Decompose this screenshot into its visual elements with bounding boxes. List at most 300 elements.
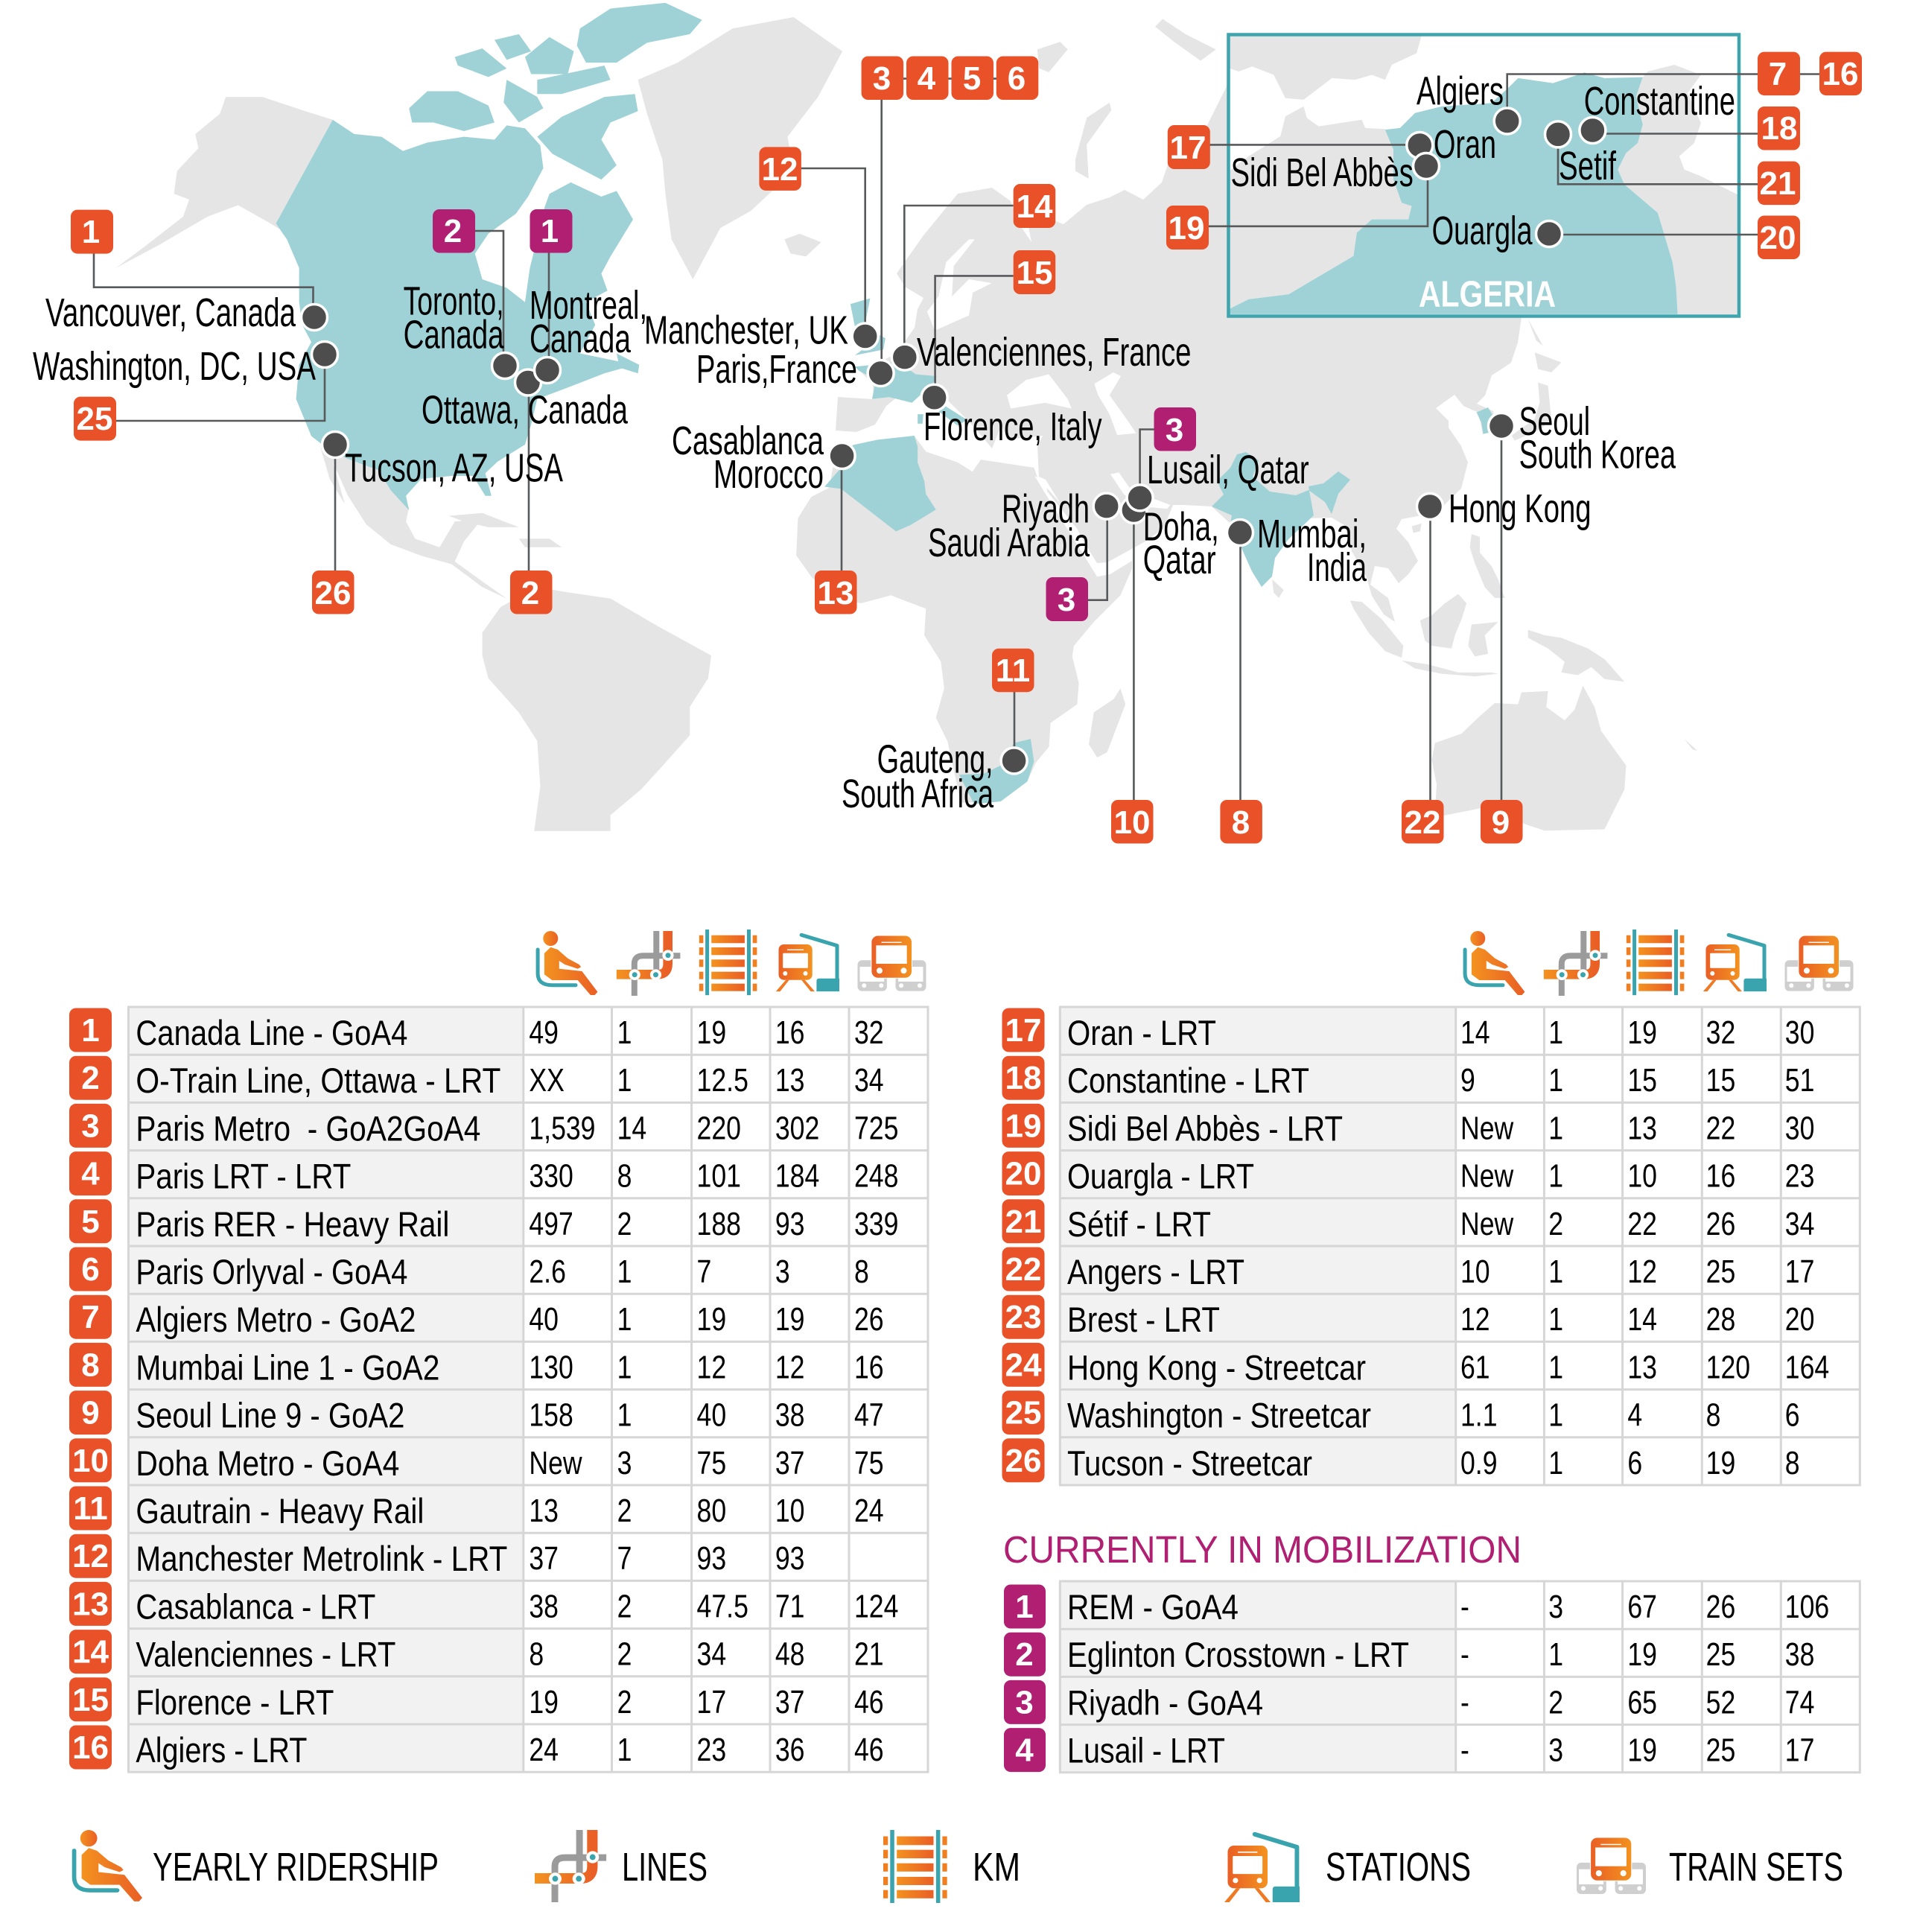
row 26 [1002, 1438, 1800, 1484]
row 8: 130 [529, 1350, 573, 1385]
map number badges: 2 [521, 575, 539, 611]
row 22: 25 [1706, 1254, 1735, 1290]
row 24 [1002, 1343, 1829, 1388]
row 1: 32 [854, 1015, 884, 1051]
mobilization row 4: 4 [1015, 1732, 1034, 1769]
legend: train sets: TRAIN SETS [1669, 1845, 1843, 1890]
row 20: New [1460, 1158, 1513, 1194]
row 24: 1 [1548, 1350, 1563, 1385]
row 21: 21 [1005, 1204, 1041, 1240]
row 3: 1,539 [529, 1110, 596, 1146]
row 22 [1002, 1247, 1814, 1292]
row 21: Sétif - LRT [1067, 1205, 1211, 1245]
row 7: 19 [775, 1302, 804, 1338]
row 25: 1 [1548, 1397, 1563, 1433]
row 19: 1 [1548, 1110, 1563, 1146]
row 19: 30 [1785, 1110, 1814, 1146]
row 24: 120 [1706, 1350, 1750, 1385]
row 26: Tucson - Streetcar [1067, 1444, 1312, 1484]
inset title: ALGERIA: ALGERIA [1419, 274, 1556, 315]
row 8: 12 [697, 1350, 726, 1385]
legend: stations: STATIONS [1326, 1845, 1471, 1890]
row 4: 101 [697, 1158, 741, 1194]
row 20: 16 [1706, 1158, 1735, 1194]
row 14: 48 [775, 1636, 804, 1672]
row 15: 2 [617, 1684, 632, 1720]
map number badges: 1 [82, 214, 100, 250]
row 16: 23 [697, 1732, 726, 1768]
city labels: South Africa [842, 772, 994, 816]
map number badges: 4 [918, 60, 936, 97]
row 12: 12 [72, 1538, 109, 1574]
row 23: 20 [1785, 1302, 1814, 1338]
legend: lines: LINES [622, 1845, 708, 1890]
row 26: 1 [1548, 1445, 1563, 1481]
row 10 [69, 1438, 884, 1484]
map number badges: 8 [1232, 804, 1250, 841]
row 8: 16 [854, 1350, 884, 1385]
mobilization row 4: 19 [1627, 1732, 1657, 1768]
map number badges: 9 [1492, 804, 1510, 841]
map number badges: 15 [1017, 255, 1052, 291]
mobilization row 2 [1004, 1633, 1814, 1677]
row 2: 1 [617, 1063, 632, 1099]
row 21 [1002, 1199, 1814, 1245]
row 14 [69, 1630, 884, 1675]
row 23: 1 [1548, 1302, 1563, 1338]
mobilization row 2: 2 [1015, 1636, 1034, 1673]
location dots [301, 108, 1606, 774]
row 5: 339 [854, 1206, 898, 1242]
row 23: Brest - LRT [1067, 1300, 1220, 1340]
city labels: Gauteng, [877, 737, 993, 782]
row 3: 725 [854, 1110, 898, 1146]
mobilization row 4: 25 [1706, 1732, 1735, 1768]
row 10: 37 [775, 1445, 804, 1481]
row 18: Constantine - LRT [1067, 1061, 1309, 1101]
row 10: Doha Metro - GoA4 [136, 1444, 399, 1484]
row 16: 24 [529, 1732, 559, 1768]
row 6: 2.6 [529, 1254, 566, 1290]
mobilization row 3 [1004, 1680, 1814, 1724]
mobilization row 3: 52 [1706, 1685, 1735, 1720]
city labels: India [1307, 545, 1367, 590]
row 16: Algiers - LRT [136, 1731, 307, 1770]
row 9: 1 [617, 1397, 632, 1433]
row 4 [69, 1151, 898, 1197]
row 14: 34 [697, 1636, 726, 1672]
row 16: 36 [775, 1732, 804, 1768]
row 2: 12.5 [697, 1063, 748, 1099]
row 22: 22 [1005, 1251, 1041, 1288]
row 23: 23 [1005, 1299, 1041, 1335]
mobilization row 2: Eglinton Crosstown - LRT [1067, 1636, 1409, 1675]
row 8: 1 [617, 1350, 632, 1385]
row 16: 1 [617, 1732, 632, 1768]
row 1: 16 [775, 1015, 804, 1051]
map number badges: 3 [873, 60, 891, 97]
row 23 [1002, 1295, 1814, 1340]
mobilization row 3: 2 [1548, 1685, 1563, 1720]
row 25 [1002, 1391, 1800, 1436]
row 9: Seoul Line 9 - GoA2 [136, 1396, 404, 1436]
row 1: 1 [617, 1015, 632, 1051]
row 4: 248 [854, 1158, 898, 1194]
row 26: 19 [1706, 1445, 1735, 1481]
mobilization row 1 [1004, 1585, 1829, 1628]
row 22: 12 [1627, 1254, 1657, 1290]
city labels: Toronto, [404, 279, 504, 323]
row 4: 4 [81, 1156, 100, 1192]
row 11: 24 [854, 1493, 884, 1529]
map number badges: 26 [315, 575, 351, 611]
row 6: 3 [775, 1254, 790, 1290]
row 2: 34 [854, 1063, 884, 1099]
leader lines [94, 74, 1819, 800]
row 26: 0.9 [1460, 1445, 1498, 1481]
row 13: 38 [529, 1589, 559, 1624]
row 14: 14 [72, 1634, 109, 1671]
row 9 [69, 1391, 884, 1436]
city labels: Algiers [1417, 69, 1504, 114]
mobilization row 4: Lusail - LRT [1067, 1732, 1225, 1771]
row 21: 22 [1627, 1206, 1657, 1242]
map number badges: 3 [1166, 412, 1183, 448]
map number badges: 16 [1822, 56, 1858, 92]
row 13: 71 [775, 1589, 804, 1624]
city labels: Sidi Bel Abbès [1231, 150, 1414, 195]
row 12: Manchester Metrolink - LRT [136, 1539, 507, 1579]
row 18: 15 [1627, 1063, 1657, 1099]
row 26: 8 [1785, 1445, 1800, 1481]
row 5: 2 [617, 1206, 632, 1242]
row 12: 93 [697, 1541, 726, 1577]
map number badges: 14 [1017, 188, 1053, 225]
row 6: Paris Orlyval - GoA4 [136, 1253, 407, 1292]
row 6: 6 [81, 1251, 100, 1288]
row 15 [69, 1677, 884, 1723]
row 16: 16 [72, 1729, 109, 1766]
mobilization row 3: Riyadh - GoA4 [1067, 1683, 1263, 1723]
map number badges: 22 [1405, 804, 1440, 841]
row 20: Ouargla - LRT [1067, 1157, 1254, 1197]
land: Southeast Asia and Australia [1272, 524, 1697, 830]
row 18: 18 [1005, 1060, 1041, 1096]
row 3: 302 [775, 1110, 819, 1146]
row 16 [69, 1725, 884, 1770]
row 19: 22 [1706, 1110, 1735, 1146]
teal: Canada and USA [276, 3, 702, 510]
map number badges: 21 [1760, 165, 1796, 202]
teal: India [1212, 452, 1350, 587]
row 7 [69, 1295, 884, 1340]
row 8 [69, 1343, 884, 1388]
row 20: 20 [1005, 1156, 1041, 1192]
map number badges: 25 [77, 401, 112, 437]
mobilization row 1: - [1460, 1589, 1469, 1625]
row 7: 19 [697, 1302, 726, 1338]
teal: UK, France, Italy [851, 299, 967, 425]
map number badges: 2 [444, 213, 462, 250]
row 12: 93 [775, 1541, 804, 1577]
map number badges: 11 [996, 652, 1030, 689]
land: Eurasia [836, 45, 1713, 622]
row 25: 8 [1706, 1397, 1720, 1433]
world map [33, 3, 1862, 843]
row 17: 30 [1785, 1015, 1814, 1051]
row 13 [69, 1582, 898, 1627]
row 11: 10 [775, 1493, 804, 1529]
legend: km [883, 1830, 1020, 1903]
row 6 [69, 1247, 869, 1292]
table: operating systems 1-16 [69, 1007, 929, 1772]
row 13: 13 [72, 1586, 109, 1622]
row 3: 220 [697, 1110, 741, 1146]
land: Japan [1511, 320, 1561, 440]
row 2: 13 [775, 1063, 804, 1099]
row 11: 2 [617, 1493, 632, 1529]
row 19 [1002, 1104, 1814, 1148]
legend: yearly ridership: YEARLY RIDERSHIP [153, 1845, 439, 1890]
row 7: 7 [81, 1299, 100, 1335]
row 5 [69, 1199, 898, 1245]
row 21: 34 [1785, 1206, 1814, 1242]
row 9: 9 [81, 1395, 100, 1431]
row 15: 15 [72, 1682, 109, 1718]
mobilization row 1: 26 [1706, 1589, 1735, 1625]
city labels: Riyadh [1002, 487, 1090, 532]
map number badges: 1 [541, 213, 559, 250]
row 12 [69, 1534, 804, 1579]
city labels: Florence, Italy [923, 404, 1102, 449]
row 12: 7 [617, 1541, 632, 1577]
row 23: 14 [1627, 1302, 1657, 1338]
row 22: Angers - LRT [1067, 1253, 1244, 1292]
row 10: New [529, 1445, 582, 1481]
row 8: 8 [81, 1347, 100, 1383]
row 9: 40 [697, 1397, 726, 1433]
legend [74, 1830, 1843, 1903]
row 6: 1 [617, 1254, 632, 1290]
row 18: 9 [1460, 1063, 1475, 1099]
city labels: Washington, DC, USA [33, 344, 316, 389]
mobilization row 4: 3 [1548, 1732, 1563, 1768]
row 24: 24 [1005, 1347, 1042, 1383]
city labels: South Korea [1519, 433, 1676, 477]
seas: Baltic, Black, Caspian [927, 239, 1136, 435]
teal: Algeria, South Africa [824, 436, 1034, 804]
row 22: 17 [1785, 1254, 1814, 1290]
legend: yearly ridership [74, 1830, 439, 1901]
row 25: 1.1 [1460, 1397, 1498, 1433]
column icons: left table [538, 930, 926, 996]
row 12: 37 [529, 1541, 559, 1577]
city labels: Casablanca [672, 419, 824, 463]
mobilization row 3: 3 [1015, 1684, 1034, 1720]
legend: train sets [1577, 1837, 1843, 1894]
row 6: 8 [854, 1254, 869, 1290]
mobilization row 1: REM - GoA4 [1067, 1588, 1239, 1627]
row 17: 14 [1460, 1015, 1490, 1051]
city labels: Saudi Arabia [928, 521, 1090, 565]
row 17: Oran - LRT [1067, 1014, 1216, 1053]
mobilization row 2: 1 [1548, 1637, 1563, 1673]
row 15: 46 [854, 1684, 884, 1720]
row 18: 1 [1548, 1063, 1563, 1099]
mobilization row 4 [1004, 1728, 1814, 1772]
row 19: 19 [1005, 1108, 1041, 1144]
mobilization row 2: 25 [1706, 1637, 1735, 1673]
row 21: 26 [1706, 1206, 1735, 1242]
row 18: 51 [1785, 1063, 1814, 1099]
row 4: Paris LRT - LRT [136, 1157, 351, 1197]
map number badges: 17 [1170, 130, 1206, 166]
heading: currently in mobilization: CURRENTLY IN MOBILIZATION [1003, 1528, 1522, 1571]
table: currently in mobilization [1004, 1581, 1861, 1773]
row 4: 184 [775, 1158, 819, 1194]
city labels: Canada [530, 317, 632, 361]
row 25: 25 [1005, 1395, 1041, 1431]
row 11: 80 [697, 1493, 726, 1529]
seas: white cut-outs [927, 239, 1170, 576]
row 1 [69, 1008, 884, 1053]
row 19: Sidi Bel Abbès - LRT [1067, 1109, 1343, 1148]
row 8: Mumbai Line 1 - GoA2 [136, 1348, 439, 1388]
mobilization row 2: 19 [1627, 1637, 1657, 1673]
row 18 [1002, 1056, 1814, 1101]
map number badges: 6 [1008, 60, 1026, 97]
row 10: 3 [617, 1445, 632, 1481]
row 25: 4 [1627, 1397, 1642, 1433]
mobilization row 2: 38 [1785, 1637, 1814, 1673]
land: Africa, Madagascar [796, 436, 1132, 803]
row 25: 6 [1785, 1397, 1800, 1433]
row 14: 21 [854, 1636, 884, 1672]
row 15: 19 [529, 1684, 559, 1720]
map number badges: 19 [1169, 210, 1204, 247]
mobilization row 3: - [1460, 1685, 1469, 1720]
row 20: 10 [1627, 1158, 1657, 1194]
row 5: 188 [697, 1206, 741, 1242]
row 2 [69, 1056, 884, 1101]
mobilization row 1: 106 [1785, 1589, 1829, 1625]
city labels: Constantine [1584, 79, 1735, 124]
row 17: 17 [1005, 1012, 1041, 1049]
row 13: Casablanca - LRT [136, 1587, 375, 1627]
row 13: 124 [854, 1589, 898, 1624]
legend: km: KM [973, 1845, 1020, 1890]
row 23: 12 [1460, 1302, 1490, 1338]
inset: Algeria [1229, 34, 1739, 316]
row 9: 38 [775, 1397, 804, 1433]
legend: stations [1224, 1834, 1471, 1902]
city labels: Valenciennes, France [917, 330, 1192, 375]
row 21: 2 [1548, 1206, 1563, 1242]
row 11 [69, 1487, 884, 1531]
land: gray world base [116, 17, 1713, 831]
land: Arctic Russia islands [1037, 19, 1216, 179]
city labels: Canada [404, 313, 504, 358]
row 3: 14 [617, 1110, 646, 1146]
mobilization row 1: 3 [1548, 1589, 1563, 1625]
row 7: Algiers Metro - GoA2 [136, 1300, 416, 1340]
map number badges: 13 [818, 575, 853, 611]
row 14: Valenciennes - LRT [136, 1636, 395, 1675]
countries with systems: teal [276, 3, 1495, 804]
row 11: Gautrain - Heavy Rail [136, 1492, 424, 1531]
row 11: 13 [529, 1493, 559, 1529]
seas: Red Sea, Persian Gulf, Gulf of Aden [1034, 472, 1170, 576]
row 10: 75 [854, 1445, 884, 1481]
row 22: 1 [1548, 1254, 1563, 1290]
mobilization row 3: 65 [1627, 1685, 1657, 1720]
city labels: Ottawa, Canada [422, 388, 629, 433]
row 1: 1 [81, 1012, 100, 1049]
row 7: 26 [854, 1302, 884, 1338]
city labels: Mumbai, [1257, 512, 1367, 556]
row 5: 497 [529, 1206, 573, 1242]
row 24: 13 [1627, 1350, 1657, 1385]
row 4: 330 [529, 1158, 573, 1194]
row 10: 10 [72, 1443, 109, 1479]
city labels: Tucson, AZ, USA [345, 446, 563, 491]
row 18: 15 [1706, 1063, 1735, 1099]
row 15: Florence - LRT [136, 1683, 334, 1723]
map number badges: 3 [1058, 582, 1075, 618]
row 2: XX [529, 1063, 565, 1099]
row 2: 2 [81, 1060, 100, 1096]
row 9: 158 [529, 1397, 573, 1433]
row 15: 17 [697, 1684, 726, 1720]
mobilization row 2: - [1460, 1637, 1469, 1673]
mobilization row 3: 74 [1785, 1685, 1814, 1720]
city labels [33, 69, 1735, 816]
city labels: Vancouver, Canada [45, 290, 296, 335]
row 13: 2 [617, 1589, 632, 1624]
city labels: Doha, [1143, 505, 1219, 550]
legend: lines [535, 1830, 708, 1902]
row 3 [69, 1104, 898, 1148]
row 21: New [1460, 1206, 1513, 1242]
row 14: 2 [617, 1636, 632, 1672]
row 26: 6 [1627, 1445, 1642, 1481]
mobilization row 1: 67 [1627, 1589, 1657, 1625]
row 17: 19 [1627, 1015, 1657, 1051]
row 24: 164 [1785, 1350, 1829, 1385]
map number badges: 12 [762, 151, 798, 188]
row 10: 75 [697, 1445, 726, 1481]
row 8: 12 [775, 1350, 804, 1385]
teal: South Korea [1477, 407, 1495, 434]
row 17 [1002, 1008, 1814, 1053]
row 19: 13 [1627, 1110, 1657, 1146]
row 25: Washington - Streetcar [1067, 1396, 1371, 1436]
city labels: Manchester, UK [644, 308, 848, 353]
row 4: 8 [617, 1158, 632, 1194]
map number badges: 18 [1761, 110, 1797, 147]
map number badges [71, 52, 1862, 844]
map number badges: 5 [963, 60, 981, 97]
row 20: 1 [1548, 1158, 1563, 1194]
row 5: 5 [81, 1204, 100, 1240]
mobilization row 4: - [1460, 1732, 1469, 1768]
map number badges: 10 [1114, 804, 1150, 841]
row 7: 1 [617, 1302, 632, 1338]
row 5: Paris RER - Heavy Rail [136, 1205, 449, 1245]
city labels: Seoul [1519, 399, 1590, 444]
city labels: Oran [1434, 122, 1496, 167]
city labels: Qatar [1143, 538, 1216, 582]
